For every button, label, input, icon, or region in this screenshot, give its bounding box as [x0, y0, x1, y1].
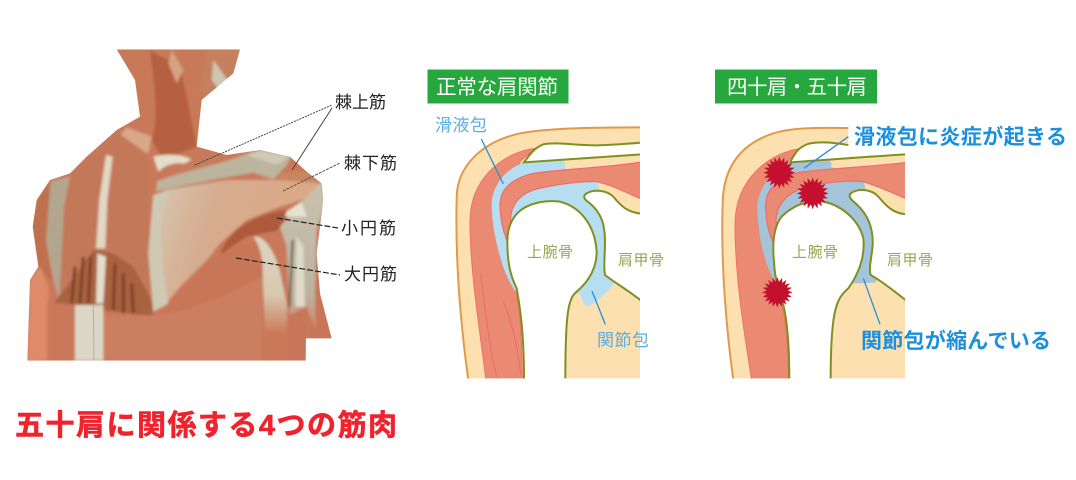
humerus [773, 201, 864, 380]
synovial bursa and joint capsule [492, 160, 617, 306]
inflammation burst 1 [763, 157, 795, 189]
skin layer [722, 127, 907, 380]
inflamed bursa and contracted capsule [757, 161, 882, 283]
leader line: capsule [863, 278, 880, 324]
scapula [850, 190, 910, 301]
callout: capsule contraction: 関節包が縮んでいる [861, 329, 1051, 353]
label: infraspinatus: 棘下筋 [344, 154, 397, 173]
acromion [524, 143, 642, 162]
label: scapula: 肩甲骨 [887, 252, 933, 269]
deltoid muscle [735, 148, 802, 380]
humerus [507, 201, 597, 380]
heading: frozen shoulder: 四十肩・五十肩 [727, 76, 867, 99]
label: scapula: 肩甲骨 [618, 252, 664, 269]
tendon [500, 162, 642, 242]
muscle labels with leader lines [195, 93, 397, 284]
heading: normal shoulder joint [428, 70, 568, 104]
inflammation burst 2 [797, 177, 829, 209]
diagram: normal shoulder [456, 127, 645, 380]
label: humerus: 上腕骨 [527, 244, 573, 261]
deltoid muscle [470, 148, 535, 380]
heading: normal shoulder joint: 正常な肩関節 [436, 76, 558, 99]
inflammation burst 3 [762, 277, 793, 308]
callout: bursa inflammation: 滑液包に炎症が起きる [854, 125, 1067, 149]
tendon [766, 162, 907, 242]
leader lines [481, 139, 605, 324]
label: joint capsule: 関節包 [597, 331, 649, 350]
heading: frozen shoulder [715, 70, 877, 104]
skin layer [456, 127, 642, 380]
label: teres major: 大円筋 [344, 265, 397, 284]
leader line: bursa [804, 137, 848, 168]
label: humerus: 上腕骨 [792, 244, 838, 261]
acromion [792, 143, 848, 162]
label: teres minor: 小円筋 [341, 219, 396, 238]
scapula [584, 191, 645, 301]
illustration: back and shoulder muscles [20, 40, 340, 363]
diagram: frozen shoulder [722, 127, 910, 380]
label: bursa: 滑液包 [435, 116, 487, 135]
title: 五十肩に関係する4つの筋肉 [15, 409, 397, 442]
label: supraspinatus: 棘上筋 [335, 93, 386, 112]
